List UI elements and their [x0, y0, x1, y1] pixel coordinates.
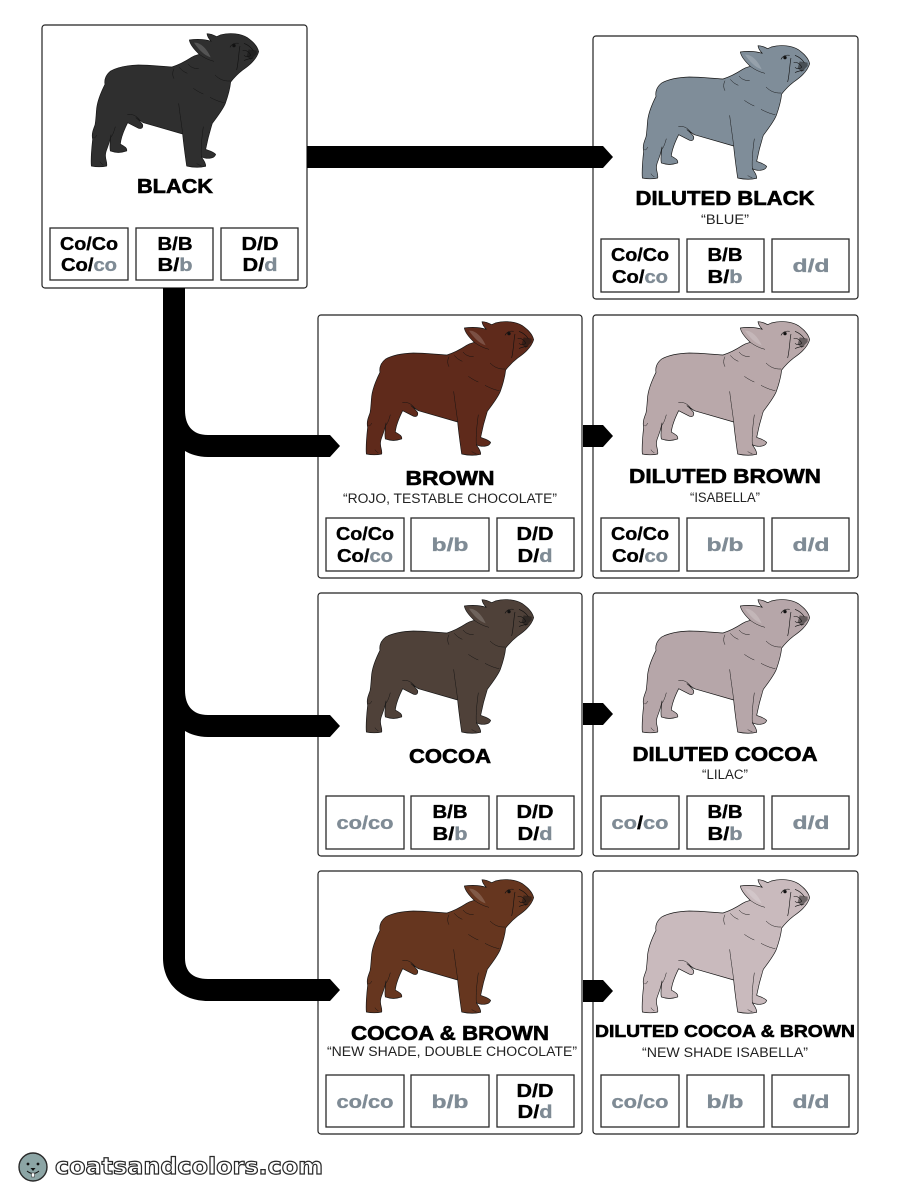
gene box: Co: Co/Co	[336, 524, 394, 544]
gene box: co: co/co	[612, 1092, 669, 1112]
gene box: B: B/b	[432, 824, 468, 844]
gene box: Co: Co/co	[612, 546, 668, 566]
panel: cocoa and brown	[318, 871, 582, 1134]
gene box: co	[326, 1075, 404, 1127]
subtitle: lilac: “LILAC”	[702, 767, 748, 782]
gene box: d: d/d	[792, 256, 830, 276]
gene box: D: D/d	[518, 1102, 552, 1122]
heading: brown: BROWN	[406, 468, 494, 490]
heading: diluted brown: DILUTED BROWN	[629, 466, 821, 488]
gene box: B: B/B	[708, 802, 742, 822]
gene box: D: D/D	[516, 802, 554, 822]
gene box: b	[687, 518, 764, 571]
heading: cocoa: COCOA	[409, 746, 491, 768]
subtitle: rojo: “ROJO, TESTABLE CHOCOLATE”	[343, 491, 557, 506]
gene box: co	[601, 796, 679, 849]
icon: new shade isabella dog	[642, 880, 810, 1013]
panel: diluted brown	[593, 315, 858, 578]
gene box: d	[772, 518, 849, 571]
gene box: co	[326, 796, 404, 849]
gene box: d: d/d	[792, 1092, 830, 1112]
gene box: D	[221, 228, 298, 280]
gene box: co: co/co	[336, 1092, 394, 1112]
gene box: B	[136, 228, 213, 280]
gene box: b: b/b	[706, 535, 744, 555]
gene box: D: D/D	[516, 1081, 554, 1101]
gene box: B	[687, 796, 764, 849]
arrow: black to diluted black	[307, 146, 613, 168]
gene box: B: B/b	[158, 255, 192, 275]
gene box: b	[411, 1075, 489, 1127]
panel: diluted cocoa and brown	[593, 871, 858, 1134]
gene box: B: B/B	[708, 245, 742, 265]
gene box: co	[601, 1075, 679, 1127]
icon: brown dog	[366, 322, 534, 455]
gene box: Co	[50, 228, 128, 280]
subtitle: new shade isabella: “NEW SHADE ISABELLA”	[642, 1045, 808, 1060]
heading: black: BLACK	[137, 176, 214, 198]
heading: diluted cocoa and brown: DILUTED COCOA & BROWN	[595, 1021, 855, 1041]
gene box: Co	[601, 239, 679, 292]
gene box: co: co/co	[336, 813, 394, 833]
gene box: b	[687, 1075, 764, 1127]
icon: isabella dog	[642, 322, 810, 455]
gene box: Co	[326, 518, 404, 571]
gene box: Co: Co/co	[612, 267, 668, 287]
icon: cocoa dog	[366, 600, 534, 733]
heading: cocoa and brown: COCOA & BROWN	[351, 1023, 549, 1045]
gene box: d: d/d	[792, 813, 830, 833]
gene box: B: B/b	[708, 267, 742, 287]
gene box: B: B/b	[708, 824, 742, 844]
gene box: D: D/d	[242, 255, 278, 275]
arrow: brown to diluted brown	[583, 425, 613, 447]
arrow: cocoa to diluted cocoa	[583, 703, 613, 725]
gene box: D: D/D	[242, 234, 278, 254]
gene box: B: B/B	[158, 234, 192, 254]
gene box: Co: Co/co	[61, 255, 117, 275]
gene box: b	[411, 518, 489, 571]
gene box: co: co/co	[612, 813, 668, 833]
gene box: b: b/b	[706, 1092, 744, 1112]
icon: lilac dog	[642, 600, 810, 733]
heading: diluted cocoa: DILUTED COCOA	[632, 744, 818, 766]
gene box: D	[497, 796, 574, 849]
panel: diluted cocoa	[593, 593, 858, 856]
panel: diluted black	[593, 36, 858, 299]
gene box: d	[772, 796, 849, 849]
arrow: black trunk to brown, cocoa and cocoa and brown	[163, 288, 340, 1001]
gene box: B	[411, 796, 489, 849]
gene box: B	[687, 239, 764, 292]
gene box: Co: Co/co	[337, 546, 393, 566]
gene box: Co: Co/Co	[60, 234, 118, 254]
gene box: b: b/b	[432, 535, 468, 555]
gene box: D	[497, 1075, 574, 1127]
subtitle: blue: “BLUE”	[701, 212, 749, 227]
gene box: Co: Co/Co	[611, 245, 669, 265]
gene box: d	[772, 239, 849, 292]
icon: dog face	[19, 1153, 47, 1181]
website text: coatsandcolors.com	[55, 1154, 323, 1180]
subtitle: isabella: “ISABELLA”	[690, 490, 760, 505]
icon: blue dog	[642, 46, 810, 179]
gene box: D: D/d	[518, 824, 552, 844]
subtitle: double chocolate: “NEW SHADE, DOUBLE CHOCOLATE”	[327, 1044, 577, 1059]
panel: brown	[318, 315, 582, 578]
gene box: Co: Co/Co	[611, 524, 669, 544]
gene box: Co	[601, 518, 679, 571]
heading: diluted black: DILUTED BLACK	[636, 188, 815, 210]
gene box: D: D/D	[516, 524, 554, 544]
icon: black dog	[91, 34, 259, 167]
icon: cocoa and brown dog	[366, 880, 534, 1013]
panel: cocoa	[318, 593, 582, 856]
gene box: b: b/b	[432, 1092, 468, 1112]
gene box: B: B/B	[432, 802, 468, 822]
logo: coatsandcolors.com	[19, 1153, 323, 1181]
gene box: D: D/d	[518, 546, 552, 566]
panel: black	[42, 25, 307, 288]
gene box: D	[497, 518, 574, 571]
arrow: cocoa and brown to diluted	[583, 980, 613, 1002]
gene box: d	[772, 1075, 849, 1127]
gene box: d: d/d	[792, 535, 830, 555]
